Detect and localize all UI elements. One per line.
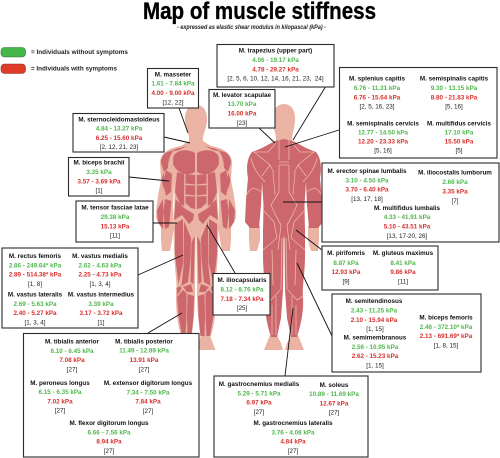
flexor digitorum longus: 6.66 - 7.56 kPa: [87, 429, 131, 436]
vastus intermedius: 3.17 - 3.72 kPa: [79, 310, 123, 317]
piriformis: [9]: [342, 278, 350, 285]
vastus medialis: [1, 3, 4]: [89, 281, 111, 288]
panel: levator scapulae: M. levator scapulae: [213, 92, 272, 99]
gastrocnemius medialis: M. gastrocnemius medialis: [219, 381, 300, 388]
gastrocnemius medialis: [27]: [254, 409, 264, 416]
erector spinae lumbalis: M. erector spinae lumbalis: [327, 168, 407, 175]
rectus femoris: 2.86 - 249.64* kPa: [9, 262, 62, 269]
panel: sternocleidomastoideus: [2, 12, 21, 23]: [100, 144, 139, 151]
front body figure: [156, 105, 236, 350]
panel: iliocapsularis: [25]: [237, 305, 247, 312]
vastus lateralis: M. vastus lateralis: [8, 291, 63, 298]
flexor digitorum longus: [27]: [104, 448, 114, 455]
piriformis: 12.93 kPa: [332, 269, 361, 276]
piriformis: 8.87 kPa: [333, 260, 359, 267]
biceps femoris: [419, 314, 473, 349]
panel: trapezius: 4.78 - 29.27 kPa: [252, 66, 299, 73]
semispinalis cervicis: 12.77 - 14.50 kPa: [358, 129, 409, 136]
soleus: [309, 382, 359, 416]
panel: iliocapsularis: [213, 274, 270, 315]
panel: biceps brachii: [1]: [95, 188, 103, 194]
gastrocnemius lateralis: 4.84 kPa: [280, 438, 306, 446]
semitendinosus: 2.10 - 15.94 kPa: [351, 317, 398, 324]
rectus femoris: M. rectus femoris: [9, 253, 62, 260]
vastus lateralis: 2.40 - 5.27 kPa: [13, 310, 57, 317]
panel: levator scapulae: [23]: [237, 120, 247, 127]
back figure right half: [284, 104, 323, 350]
tibialis anterior: [27]: [67, 366, 77, 373]
legend: without symptoms label: = Individuals without symptoms: [31, 49, 128, 56]
flexor digitorum longus: [69, 420, 149, 455]
soleus: 12.67 kPa: [320, 400, 349, 407]
gastrocnemius lateralis: 3.76 - 4.08 kPa: [271, 429, 315, 436]
panel: iliocapsularis: M. iliocapsularis: [218, 277, 267, 284]
extensor digitorum longus: M. extensor digitorum longus: [104, 380, 193, 387]
erector spinae lumbalis: 3.10 - 4.50 kPa: [345, 177, 389, 184]
rectus femoris: [9, 253, 62, 288]
splenius capitis: 6.76 - 15.64 kPa: [354, 94, 401, 101]
semitendinosus: 2.43 - 11.25 kPa: [351, 307, 398, 314]
multifidus lumbalis: 5.10 - 43.51 kPa: [384, 223, 431, 230]
panel: trapezius: 4.06 - 19.17 kPa: [252, 57, 299, 64]
gastrocnemius lateralis: [253, 420, 333, 455]
multifidus lumbalis: 4.33 - 41.91 kPa: [384, 214, 431, 221]
semispinalis capitis: [5, 16]: [445, 103, 463, 110]
vastus medialis: [72, 253, 128, 288]
gastrocnemius medialis: 5.29 - 5.71 kPa: [237, 390, 281, 397]
panel: iliocapsularis: 8.12 - 8.76 kPa: [220, 286, 264, 293]
peroneus longus: [30, 380, 90, 414]
gluteus maximus: [11]: [398, 278, 408, 285]
gastrocnemius lateralis: M. gastrocnemius lateralis: [253, 420, 333, 427]
vastus medialis: M. vastus medialis: [72, 253, 128, 260]
legend: with symptoms label: = Individuals with symptoms: [31, 66, 117, 72]
vastus medialis: 2.62 - 4.63 kPa: [78, 262, 122, 269]
panel: masseter: M. masseter: [155, 72, 192, 78]
panel: trapezius: M. trapezius (upper part): [239, 48, 312, 54]
semitendinosus: [1, 15]: [366, 326, 384, 333]
semimembranous: 2.62 - 15.23 kPa: [352, 353, 399, 360]
iliocostalis lumborum: [418, 169, 492, 205]
iliocostalis lumborum: 2.66 kPa: [442, 179, 468, 186]
tibialis posterior: 11.49 - 12.89 kPa: [119, 348, 169, 355]
semispinalis cervicis: [347, 120, 419, 154]
semispinalis cervicis: 12.20 - 23.33 kPa: [358, 138, 409, 145]
panel: biceps brachii: 3.57 - 3.69 kPa: [77, 178, 121, 185]
multifidus cervicis: 15.50 kPa: [445, 138, 474, 145]
splenius capitis: [2, 5, 16, 23]: [359, 103, 395, 110]
semimembranous: [344, 334, 407, 370]
panel: trapezius: [217, 44, 334, 87]
panel: tensor fasciae latae: 15.13 kPa: [101, 223, 130, 230]
erector spinae lumbalis: [327, 168, 407, 203]
gluteus maximus: 8.41 kPa: [390, 260, 416, 267]
gluteus maximus: [373, 250, 434, 285]
panel: biceps brachii: 3.35 kPa: [86, 169, 112, 176]
panel: sternocleidomastoideus: [73, 114, 164, 152]
panel: calf muscles: [214, 376, 368, 457]
tibialis posterior: 13.91 kPa: [130, 357, 159, 364]
panel: masseter: 1.61 - 7.84 kPa: [151, 81, 195, 88]
semispinalis cervicis: [5, 16]: [374, 148, 392, 154]
extensor digitorum longus: [104, 380, 193, 415]
erector spinae lumbalis: [13, 17, 18]: [351, 196, 383, 203]
connector lines: [129, 86, 339, 376]
gluteus maximus: 9.86 kPa: [390, 269, 416, 276]
panel: iliocapsularis: 7.18 - 7.34 kPa: [220, 296, 264, 303]
vastus intermedius: M. vastus intermedius: [68, 291, 135, 298]
legend: [1, 48, 128, 74]
panel: gluteal muscles: [322, 246, 438, 290]
tibialis anterior: 7.08 kPa: [59, 357, 85, 364]
legend: red swatch: [1, 64, 26, 74]
tibialis anterior: [45, 338, 99, 373]
vastus lateralis: 2.69 - 5.63 kPa: [13, 301, 57, 308]
panel: tensor fasciae latae: [11]: [110, 232, 120, 240]
semitendinosus: M. semitendinosus: [346, 298, 403, 305]
soleus: 10.89 - 11.69 kPa: [309, 391, 359, 398]
panel: masseter: 4.00 - 9.00 kPa: [151, 90, 195, 97]
vastus intermedius: [1]: [97, 319, 105, 326]
semimembranous: M. semimembranous: [344, 334, 407, 341]
extensor digitorum longus: [27]: [143, 408, 153, 415]
panel: tensor fasciae latae: 29.38 kPa: [101, 214, 130, 221]
biceps femoris: 2.13 - 691.69* kPa: [420, 333, 473, 340]
soleus: [27]: [329, 410, 339, 416]
tibialis posterior: [115, 338, 173, 373]
gastrocnemius medialis: 6.97 kPa: [246, 399, 272, 406]
front figure right half: [196, 105, 236, 350]
extensor digitorum longus: 7.84 kPa: [135, 399, 161, 406]
semispinalis capitis: M. semispinalis capitis: [420, 75, 489, 82]
back body figure: [245, 104, 323, 350]
panel: biceps brachii: [68, 158, 129, 196]
biceps femoris: [1, 8, 15]: [434, 342, 458, 349]
vastus intermedius: 3.39 kPa: [88, 301, 114, 308]
panel: masseter: [148, 68, 198, 108]
panel: sternocleidomastoideus: 6.25 - 15.60 kPa: [96, 135, 143, 142]
panel: sternocleidomastoideus: 4.84 - 13.27 kPa: [96, 126, 143, 132]
panel: tensor fasciae latae: M. tensor fasciae latae: [81, 204, 149, 212]
panel: levator scapulae: [209, 90, 275, 128]
multifidus lumbalis: [374, 205, 441, 240]
semitendinosus: [346, 298, 403, 333]
panel: trapezius: [2, 5, 6, 10, 12, 14, 16, 21, 23, 24]: [227, 76, 324, 82]
tibialis posterior: M. tibialis posterior: [115, 338, 173, 345]
peroneus longus: 6.15 - 6.35 kPa: [38, 389, 82, 396]
panel: levator scapulae: 13.70 kPa: [228, 101, 257, 108]
splenius capitis: 6.76 - 11.31 kPa: [354, 85, 401, 92]
panel: thigh muscles: [2, 248, 138, 328]
vastus lateralis: [8, 291, 63, 326]
peroneus longus: M. peroneus longus: [30, 380, 90, 387]
piriformis: M. pirifomris: [327, 250, 365, 257]
iliocostalis lumborum: 3.35 kPa: [442, 188, 468, 195]
semimembranous: [1, 15]: [366, 362, 384, 370]
panel: tensor fasciae latae: [76, 201, 153, 242]
panel: hamstrings: [332, 294, 481, 372]
erector spinae lumbalis: 3.70 - 6.40 kPa: [345, 186, 389, 193]
biceps femoris: M. biceps femoris: [419, 314, 473, 321]
multifidus cervicis: M. multifidus cervicis: [427, 120, 492, 127]
rectus femoris: [1, 8]: [28, 281, 42, 288]
iliocostalis lumborum: [7]: [451, 198, 459, 205]
subtitle: - expressed as elastic shear modulus in kilopascal (kPa) -: [177, 24, 326, 31]
multifidus lumbalis: M. multifidus lumbalis: [374, 205, 441, 212]
rectus femoris: 2.89 - 514.38* kPa: [9, 272, 62, 278]
multifidus lumbalis: [13, 17-20, 26]: [387, 233, 428, 240]
gastrocnemius medialis: [219, 381, 300, 416]
peroneus longus: 7.02 kPa: [47, 398, 73, 405]
vastus intermedius: [68, 291, 135, 326]
multifidus cervicis: [427, 120, 492, 154]
soleus: M. soleus: [320, 382, 349, 389]
flexor digitorum longus: 8.94 kPa: [96, 438, 122, 446]
tibialis anterior: 6.10 - 6.45 kPa: [50, 348, 94, 355]
multifidus cervicis: 17.10 kPa: [445, 129, 474, 136]
flexor digitorum longus: M. flexor digitorum longus: [69, 420, 149, 427]
panel: back muscles: [322, 163, 499, 242]
panel: biceps brachii: M. biceps brachii: [73, 159, 125, 166]
semispinalis capitis: 9.30 - 13.15 kPa: [431, 85, 478, 92]
tibialis posterior: [27]: [139, 366, 149, 373]
semispinalis capitis: [420, 75, 489, 110]
back figure left half: [245, 104, 284, 350]
tibialis anterior: M. tibialis anterior: [45, 338, 99, 345]
panel: cervical muscles: [340, 68, 497, 158]
semispinalis cervicis: M. semispinalis cervicis: [347, 120, 419, 127]
semispinalis capitis: 8.80 - 21.83 kPa: [431, 94, 478, 101]
gluteus maximus: M. gluteus maximus: [373, 250, 434, 257]
biceps femoris: 2.46 - 372.10* kPa: [420, 324, 473, 331]
extensor digitorum longus: 7.34 - 7.50 kPa: [126, 390, 170, 396]
gastrocnemius lateralis: [27]: [288, 448, 298, 455]
peroneus longus: [27]: [55, 408, 65, 414]
splenius capitis: M. splenius capitis: [349, 75, 405, 82]
semimembranous: 2.56 - 10.95 kPa: [352, 344, 399, 351]
front figure left half: [156, 105, 196, 350]
vastus lateralis: [1, 3, 4]: [24, 319, 46, 326]
panel: masseter: [12, 22]: [162, 99, 184, 106]
multifidus cervicis: [5]: [455, 148, 463, 154]
panel: sternocleidomastoideus: M. sternocleidomastoideus: [78, 116, 160, 123]
piriformis: [327, 250, 365, 285]
legend: green swatch: [1, 48, 26, 57]
splenius capitis: [349, 75, 405, 110]
panel: lower leg anterior muscles: [24, 334, 199, 457]
vastus medialis: 2.25 - 4.73 kPa: [78, 272, 122, 278]
iliocostalis lumborum: M. iliocostalis lumborum: [418, 169, 492, 176]
panel: levator scapulae: 16.00 kPa: [228, 110, 257, 118]
